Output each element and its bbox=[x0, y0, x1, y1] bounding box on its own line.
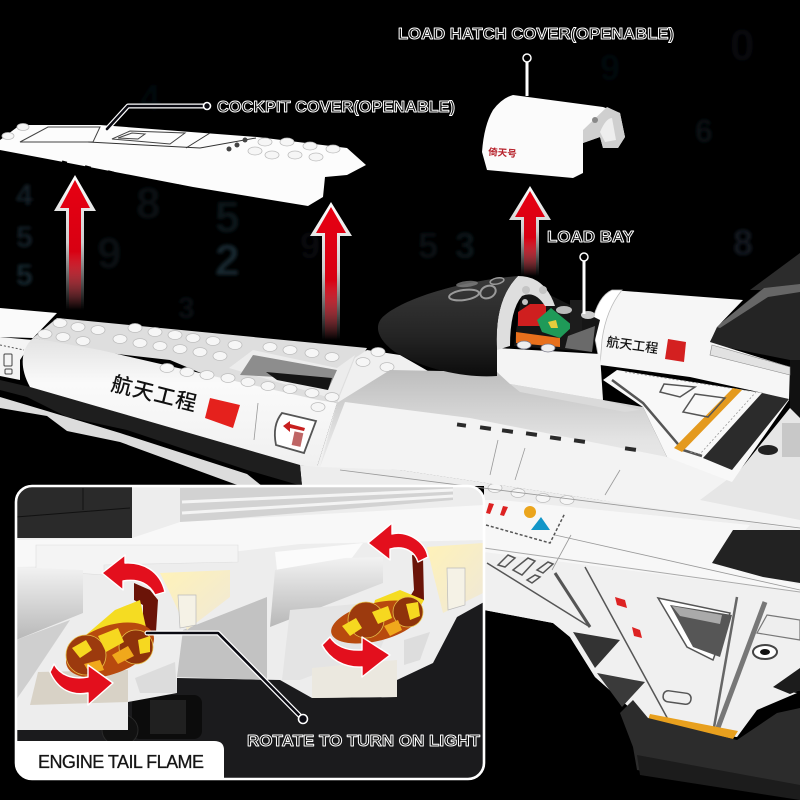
callout: load bay: LOAD BAY bbox=[547, 229, 634, 246]
load hatch cover bbox=[482, 95, 625, 178]
inset cavities bbox=[16, 543, 430, 705]
fuselage markings: 航天工程: 航天工程 bbox=[108, 368, 201, 418]
inset white hull bbox=[16, 486, 484, 730]
background digits: 5 bbox=[16, 221, 33, 254]
fuselage studs bbox=[38, 318, 574, 504]
nose slab bbox=[0, 308, 57, 338]
dark wing underside bbox=[620, 530, 800, 800]
callout: cockpit cover bbox=[107, 99, 455, 129]
background digits: 4 bbox=[140, 77, 160, 118]
hatch text 倚天号: 倚天号 bbox=[488, 144, 517, 160]
inset upper band bbox=[16, 505, 484, 567]
payload orange bbox=[516, 332, 560, 347]
callout: rotate to turn on light: ROTATE TO TURN ON LIGHT bbox=[247, 733, 480, 750]
right ramp bbox=[317, 350, 470, 470]
mid and rear hull base bbox=[300, 465, 800, 737]
background digits: 5 bbox=[16, 259, 33, 292]
callout: load bay bbox=[547, 229, 634, 314]
inset glow right bbox=[427, 543, 483, 613]
red arrow right bbox=[509, 186, 551, 276]
wing dark edge bbox=[703, 393, 789, 470]
callout: load hatch cover: LOAD HATCH COVER(OPENABLE) bbox=[398, 26, 674, 43]
payload green bbox=[537, 308, 573, 338]
cockpit cover bbox=[0, 124, 366, 206]
cargo arch ring bbox=[497, 276, 555, 350]
payload red bbox=[518, 304, 546, 326]
shuttle fuselage left bbox=[0, 308, 800, 737]
wing orange stripe bbox=[674, 388, 742, 452]
red flag decal bbox=[205, 398, 240, 428]
wing panels bbox=[658, 598, 730, 660]
dark side stripe bbox=[0, 380, 302, 486]
callout: cockpit cover: COCKPIT COVER(OPENABLE) bbox=[217, 99, 455, 116]
background digits: 8 bbox=[136, 179, 160, 228]
tail fin bbox=[710, 253, 800, 420]
white cylinder bbox=[23, 338, 337, 467]
background digits: 9 bbox=[97, 229, 121, 278]
small wing bbox=[603, 370, 789, 482]
background digits: 4 bbox=[16, 179, 33, 212]
label tab bbox=[16, 741, 224, 780]
mid fuselage slots bbox=[457, 422, 636, 452]
rotation arrows bbox=[50, 523, 428, 705]
flame left bbox=[66, 583, 158, 677]
caution sticker bbox=[275, 413, 316, 453]
cabin section bbox=[592, 290, 790, 400]
background digits: 5 bbox=[215, 193, 239, 242]
orange trailing stripe bbox=[648, 714, 738, 739]
inset dark block bbox=[16, 486, 132, 538]
inset border bbox=[16, 486, 484, 779]
callout: load hatch cover bbox=[398, 26, 674, 96]
background digits bbox=[16, 21, 754, 325]
cockpit opening bbox=[229, 350, 355, 400]
cover teeth bbox=[62, 161, 184, 188]
inset vent bars bbox=[180, 486, 453, 523]
flame right bbox=[331, 555, 424, 644]
panel: engine tail flame inset bbox=[16, 486, 484, 780]
mid fuselage bbox=[320, 370, 800, 530]
red arrow left bbox=[54, 175, 96, 310]
cargo bay bbox=[497, 276, 640, 412]
red arrow middle bbox=[310, 202, 352, 340]
background digits: 8 bbox=[733, 222, 753, 263]
cabin text: 航天工程: 航天工程 bbox=[605, 331, 660, 357]
upper stud deck bbox=[33, 318, 367, 403]
background digits: 9 bbox=[600, 47, 620, 88]
white chip strip bbox=[0, 397, 262, 486]
background digits: 0 bbox=[730, 21, 754, 70]
cabin red flag bbox=[665, 339, 686, 362]
background digits: 5 bbox=[418, 225, 438, 266]
wing dots decals bbox=[486, 503, 494, 514]
background digits: 3 bbox=[455, 225, 475, 266]
nose cone bbox=[378, 276, 518, 376]
lower wing bbox=[484, 500, 800, 739]
rear hull block bbox=[700, 408, 800, 520]
background digits: 9 bbox=[300, 225, 320, 266]
background digits: 2 bbox=[215, 236, 239, 285]
inset glow left bbox=[160, 570, 230, 630]
forward decal block bbox=[0, 337, 33, 380]
background digits: 3 bbox=[178, 292, 195, 325]
callout: rotate to turn on light bbox=[147, 633, 480, 750]
inset wheel bbox=[102, 695, 202, 746]
background digits: 6 bbox=[695, 113, 713, 149]
label tab: ENGINE TAIL FLAME bbox=[38, 752, 204, 772]
